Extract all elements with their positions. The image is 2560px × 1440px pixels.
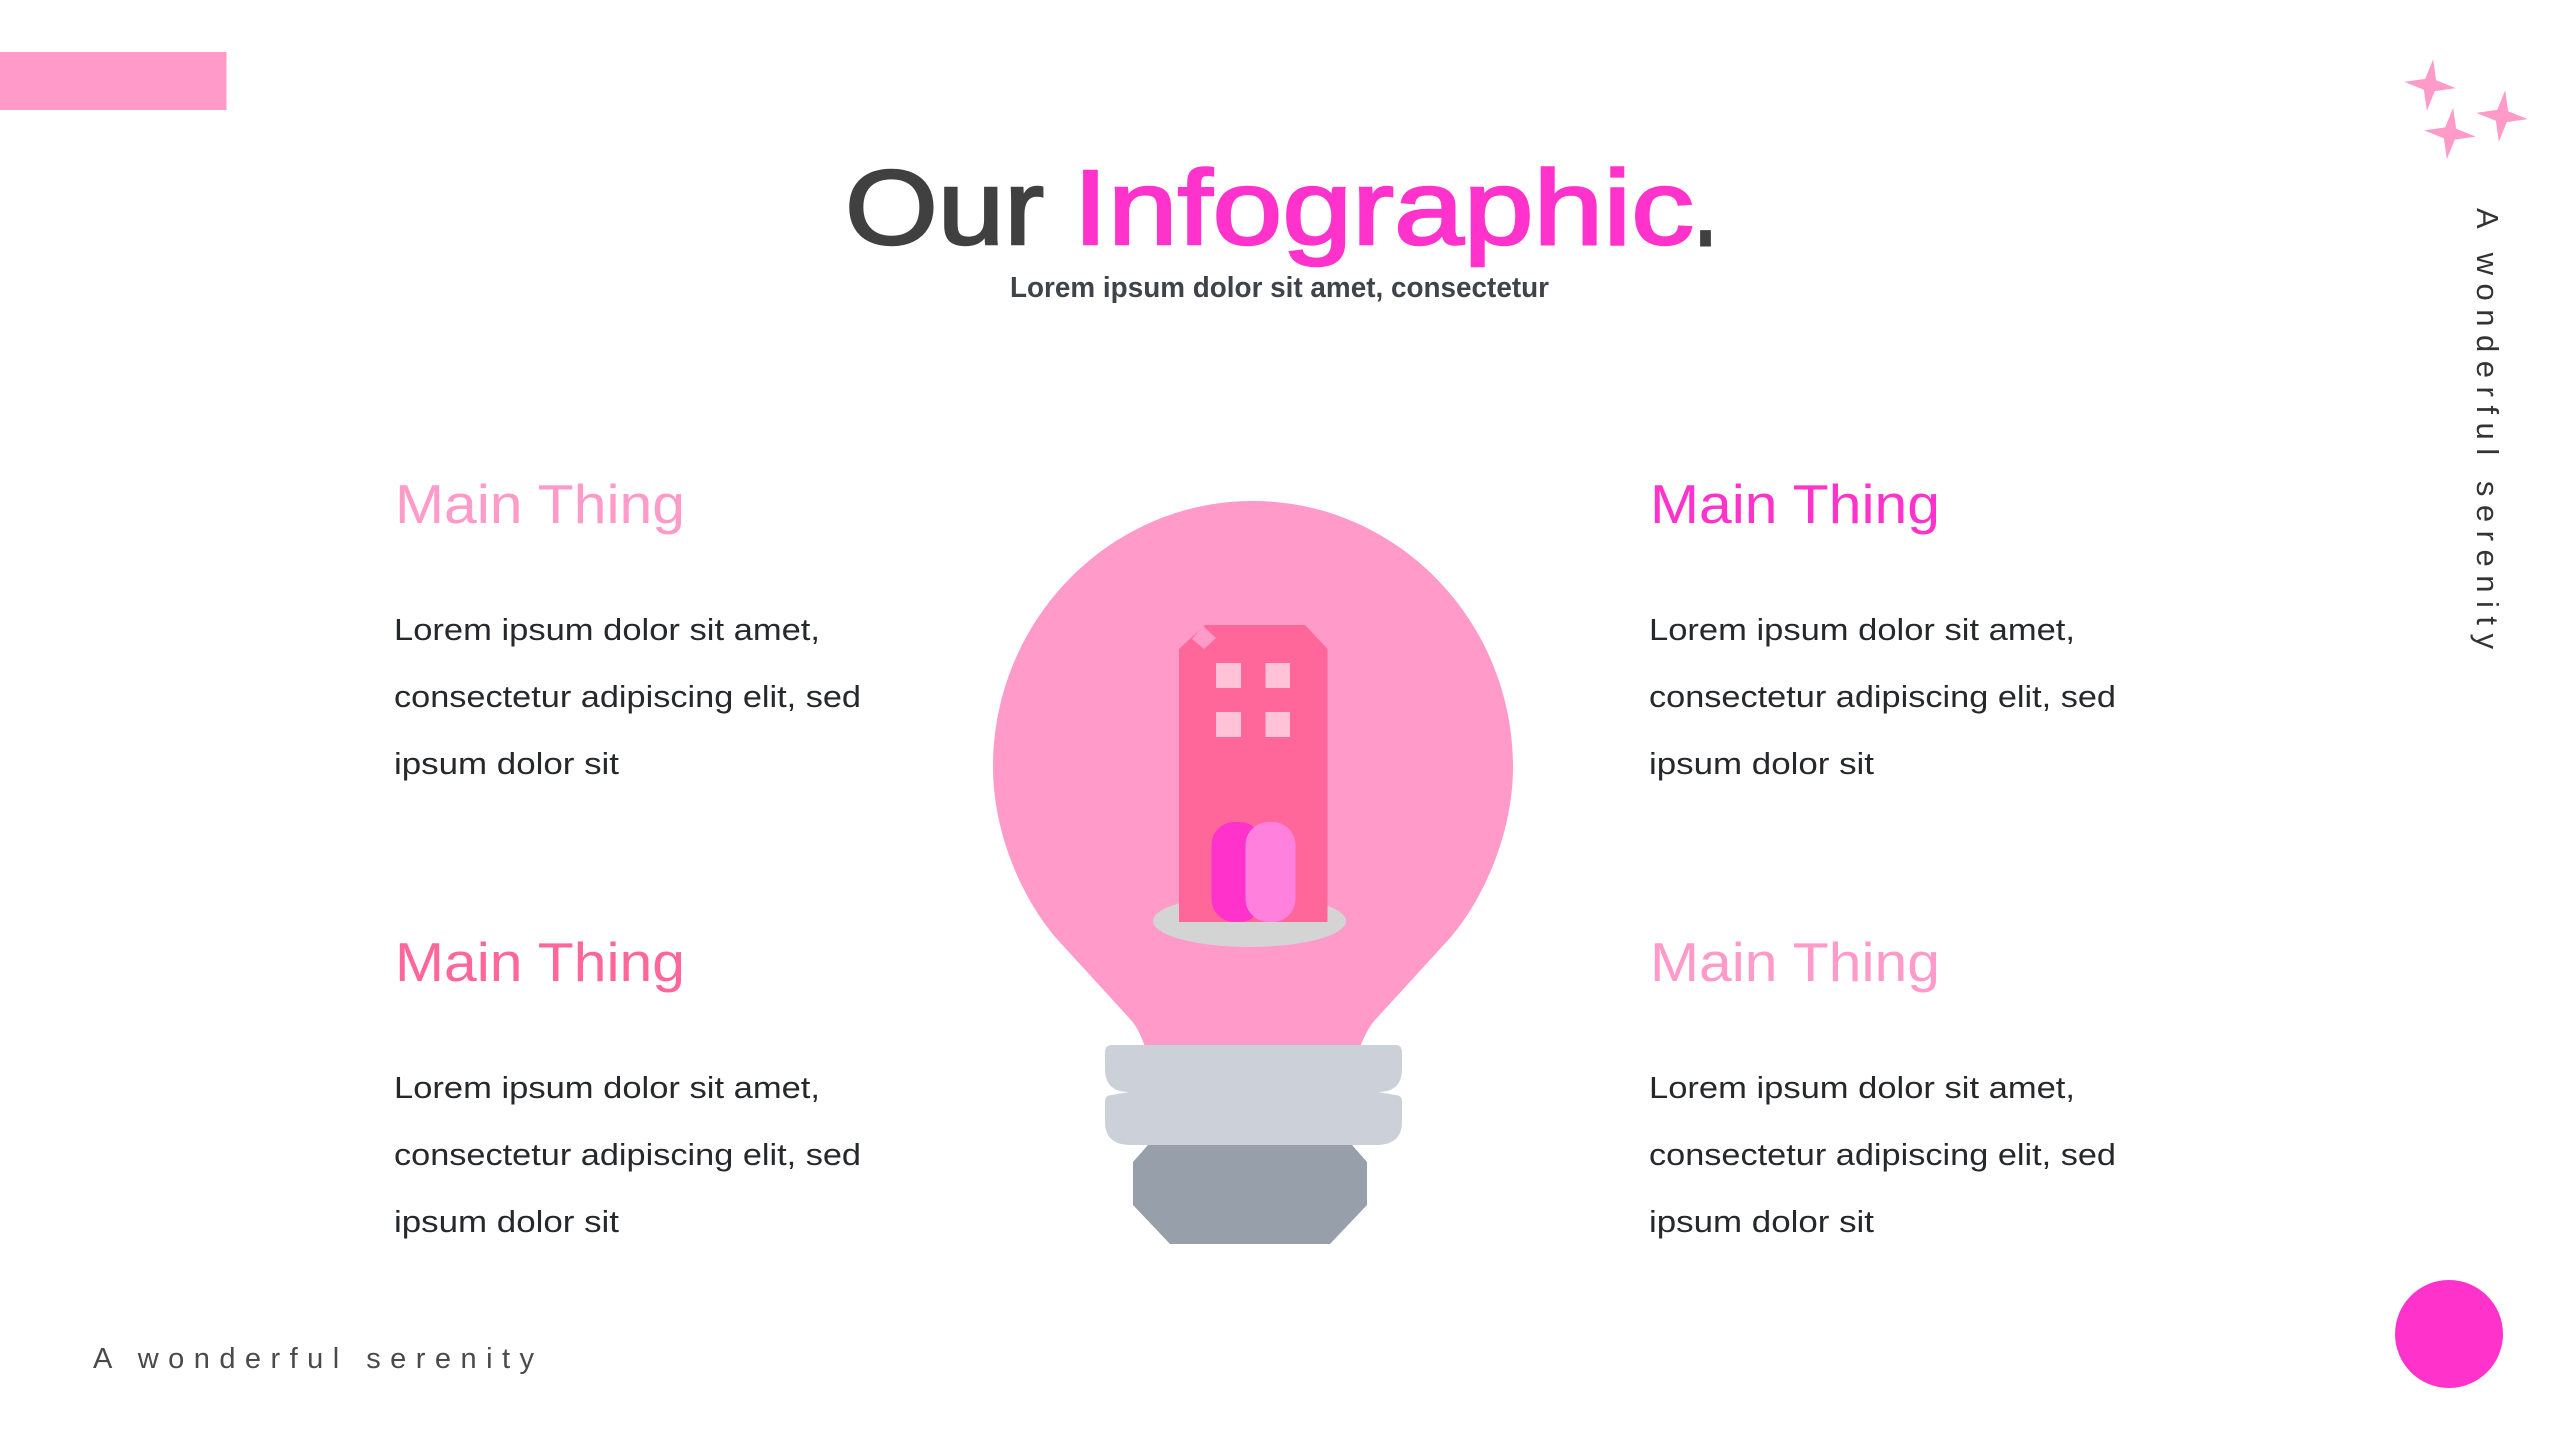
bulb glass	[993, 501, 1513, 1047]
body: top-left: ipsum dolor sit	[394, 746, 619, 781]
icon: sparkle stars	[2401, 56, 2531, 162]
bulb screw cap	[1133, 1145, 1367, 1244]
body: bottom-left: ipsum dolor sit	[394, 1204, 619, 1239]
body: bottom-right	[1649, 1070, 2116, 1239]
title: Our	[845, 149, 1044, 267]
building	[1179, 625, 1328, 922]
building door right	[1246, 822, 1296, 922]
panel: bottom-left text block	[394, 931, 861, 1239]
body: top-left	[394, 612, 861, 781]
panel: bottom-right text block	[1649, 931, 2116, 1239]
heading: bottom-right: Main Thing	[1650, 931, 1940, 993]
heading: top-left: Main Thing	[395, 473, 685, 535]
title: Infographic	[1073, 149, 1694, 267]
body: top-left: Lorem ipsum dolor sit amet,	[394, 612, 820, 647]
body: bottom-left: Lorem ipsum dolor sit amet,	[394, 1070, 820, 1105]
icon: light bulb with building	[993, 501, 1513, 1244]
body: top-right: ipsum dolor sit	[1649, 746, 1874, 781]
bulb screw bands	[1105, 1045, 1402, 1145]
panel: top-left text block	[394, 473, 861, 781]
title	[845, 149, 1716, 267]
body: top-left: consectetur adipiscing elit, sed	[394, 679, 861, 714]
title: .	[1695, 149, 1716, 267]
building ground shadow	[1153, 895, 1346, 947]
heading: bottom-left: Main Thing	[395, 931, 685, 993]
body: bottom-right: ipsum dolor sit	[1649, 1204, 1874, 1239]
footer tagline: A wonderful serenity	[93, 1343, 534, 1375]
body: top-right: Lorem ipsum dolor sit amet,	[1649, 612, 2075, 647]
top-left pink bar	[0, 52, 226, 110]
body: bottom-left	[394, 1070, 861, 1239]
panel: top-right text block	[1649, 473, 2116, 781]
body: top-right	[1649, 612, 2116, 781]
building door left	[1212, 822, 1262, 922]
body: bottom-right: consectetur adipiscing elit, sed	[1649, 1137, 2116, 1172]
building windows	[1216, 663, 1290, 737]
building corner highlight	[1192, 626, 1216, 649]
body: bottom-left: consectetur adipiscing elit, sed	[394, 1137, 861, 1172]
heading: top-right: Main Thing	[1650, 473, 1940, 535]
decorative magenta circle	[2395, 1280, 2503, 1388]
body: top-right: consectetur adipiscing elit, sed	[1649, 679, 2116, 714]
body: bottom-right: Lorem ipsum dolor sit amet,	[1649, 1070, 2075, 1105]
subtitle: Lorem ipsum dolor sit amet, consectetur	[1010, 272, 1549, 304]
vertical tagline: A wonderful serenity	[2470, 208, 2505, 650]
